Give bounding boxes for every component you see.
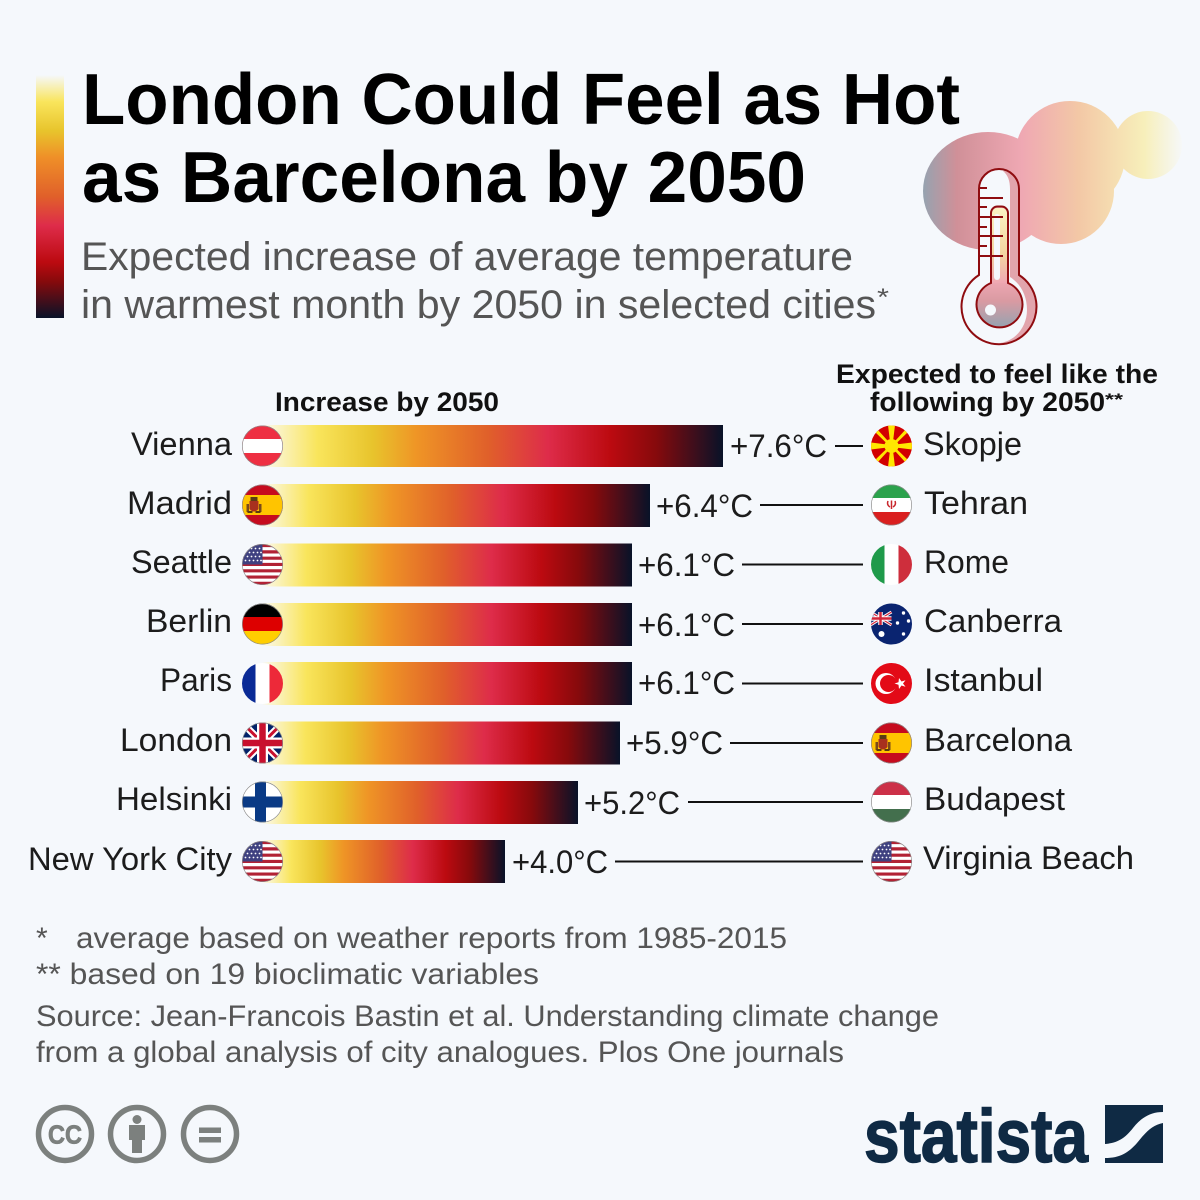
flag: Spain [242,484,284,526]
city label: Helsinki [116,781,232,817]
flag: Italy [870,544,912,586]
city label: Paris [160,662,232,698]
bar [262,484,650,527]
row: Vienna [131,425,1022,467]
column heading: feels like: Expected to feel like the [836,359,1158,389]
icon: no derivatives [184,1108,236,1160]
value: +6.1°C [638,607,735,643]
row: Madrid [127,484,1028,527]
bar [262,722,620,764]
gradient accent bar [36,75,64,318]
title [82,60,960,218]
matched city: Tehran [924,485,1028,521]
flag: Spain [870,722,912,764]
value: +6.1°C [638,547,735,583]
footnotes: * [36,922,48,955]
icon: CC licence: CC [48,1120,82,1150]
value: +4.0°C [512,844,608,880]
flag: USA [242,840,284,882]
bar [262,425,723,467]
icon: attribution [110,1108,164,1160]
title: as Barcelona by 2050 [82,138,806,218]
column heading: increase: Increase by 2050 [275,387,499,417]
city label: New York City [28,841,232,877]
matched city: Istanbul [924,662,1043,698]
value: +7.6°C [730,428,827,464]
column heading: feels like [836,359,1158,417]
subtitle: in warmest month by 2050 in selected cities [81,283,876,327]
bar [262,544,632,586]
bar [262,840,505,883]
subtitle: Expected increase of average temperature [81,235,853,279]
title: London Could Feel as Hot [82,60,960,140]
flag: Iran [870,484,912,526]
city label: Madrid [127,485,232,521]
matched city: Canberra [924,603,1062,639]
row: London [120,722,1072,764]
flag: USA [870,840,912,882]
city label: Seattle [131,544,232,580]
flag: Australia [870,603,912,645]
city label: Berlin [146,603,232,639]
value: +6.4°C [656,488,753,524]
matched city: Budapest [924,781,1065,817]
footnotes: ** based on 19 bioclimatic variables [36,958,539,991]
source: from a global analysis of city analogues. Plos One journals [36,1036,844,1069]
column heading: feels like: following by 2050 [870,387,1105,417]
city label: London [120,722,232,758]
subtitle [81,235,889,327]
flag: France [242,662,284,704]
matched city: Rome [924,544,1009,580]
column heading: feels like: ** [1105,390,1124,409]
flag: UK [242,722,284,764]
flag: North Macedonia [870,425,912,467]
source [36,1000,939,1069]
row: Helsinki [116,781,1065,824]
row: New York City [28,840,1134,883]
flag: Germany [242,603,284,645]
city label: Vienna [131,426,232,462]
icon: thermometer [962,169,1037,344]
value: +6.1°C [638,665,735,701]
footnotes: average based on weather reports from 1985-2015 [76,922,787,955]
flag: Austria [242,425,284,467]
flag: Finland [242,781,284,823]
matched city: Skopje [923,426,1022,462]
footnotes [36,922,787,991]
logo: statista: statista [864,1094,1089,1178]
matched city: Barcelona [924,722,1072,758]
bar [262,781,578,824]
icon: heat cloud [923,101,1182,250]
subtitle: * [877,284,889,311]
row: Seattle [131,544,1009,586]
source: Source: Jean-Francois Bastin et al. Understanding climate change [36,1000,939,1033]
bar [262,603,632,646]
flag: Turkey [870,662,912,704]
row: Berlin [146,603,1062,646]
row: Paris [160,662,1043,705]
flag: USA [242,544,284,586]
matched city: Virginia Beach [923,840,1134,876]
value: +5.9°C [626,725,723,761]
flag: Hungary [870,781,912,823]
value: +5.2°C [584,785,680,821]
bar [262,662,632,705]
icon: CC licence [38,1108,92,1160]
